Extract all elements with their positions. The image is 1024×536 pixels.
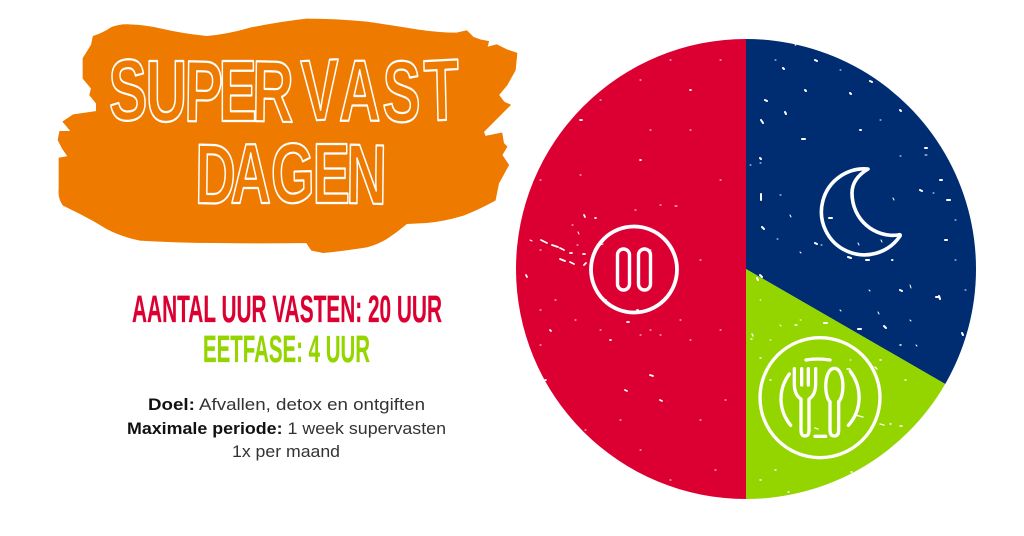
- panel: title banner: [58, 19, 517, 252]
- slice: eating (green): [746, 269, 945, 499]
- icon: pause: [591, 226, 677, 312]
- icon: moon: [821, 169, 900, 255]
- text block: goal and period: Maximale periode: 1 week supervasten: [127, 419, 446, 438]
- pie chart: [516, 39, 976, 499]
- text block: goal and period: [127, 395, 446, 461]
- title line 2: DAGEN: [195, 126, 387, 223]
- text block: goal and period: Doel: Afvallen, detox en ontgiften: [148, 395, 425, 414]
- icon: fork and spoon on plate: [760, 338, 880, 458]
- title line 1: SUPER VAST: [108, 40, 460, 141]
- heading: eating phase: EETFASE: 4 UUR: [203, 329, 370, 371]
- distressed speckles: [526, 45, 971, 492]
- heading: fasting hours: AANTAL UUR VASTEN: 20 UUR: [132, 289, 442, 331]
- orange brush stroke: [58, 19, 517, 252]
- text block: goal and period: 1x per maand: [232, 442, 340, 461]
- slice: fasting (red): [516, 39, 746, 499]
- slice: night (navy): [746, 39, 976, 384]
